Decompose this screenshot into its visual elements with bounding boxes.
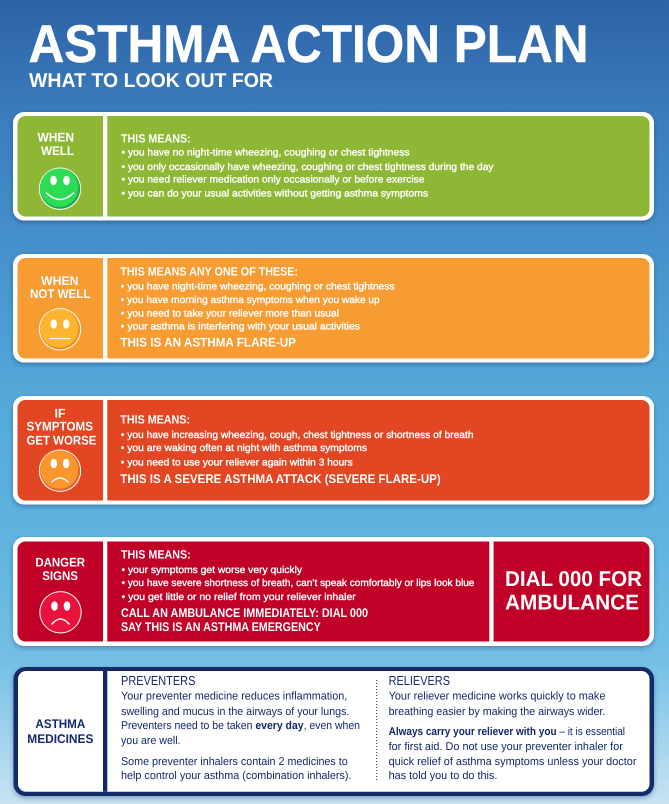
text: danger symptoms: • your symptoms get worse very quickly (122, 565, 302, 576)
zone label: when not well: WHEN (41, 274, 78, 288)
zone label: when well: WELL (41, 144, 74, 158)
text: worsening symptoms (120, 413, 474, 486)
text: when not well symptoms: • you have morning asthma symptoms when you wake up (121, 295, 380, 306)
text: danger symptoms: THIS MEANS: (121, 548, 191, 562)
zone label: danger signs: DANGER (35, 556, 85, 570)
text: relievers: Your reliever medicine works quickly to make (389, 691, 605, 703)
zone label: if symptoms get worse (26, 406, 96, 447)
text: relievers: for first aid. Do not use your preventer inhaler for (389, 741, 623, 753)
text: danger symptoms (121, 548, 475, 634)
zone label: danger signs (35, 556, 85, 583)
label: asthma medicines: MEDICINES (27, 732, 93, 746)
zone label: when not well: NOT WELL (30, 287, 91, 301)
text: when not well symptoms: • your asthma is interfering with your usual activities (121, 322, 360, 333)
panel: if symptoms get worse (13, 396, 654, 504)
text: relievers: breathing easier by making the airways wider. (389, 706, 605, 718)
text: relievers: quick relief of asthma symptoms unless your doctor (389, 756, 637, 768)
text: when well symptoms (121, 132, 494, 200)
text: when well symptoms: • you have no night-time wheezing, coughing or chest tightness (122, 148, 410, 159)
text: when well symptoms: • you only occasionally have wheezing, coughing or chest tightness during the day (122, 162, 494, 173)
panel: danger signs (13, 537, 654, 646)
panel: when well (13, 112, 654, 220)
zone label: danger signs: SIGNS (42, 569, 78, 583)
text: relievers: has told you to do this. (389, 770, 497, 782)
zone label: if symptoms get worse: GET WORSE (26, 433, 96, 447)
zone label: if symptoms get worse: SYMPTOMS (26, 420, 93, 434)
text: worsening symptoms: • you need to use your reliever again within 3 hours (121, 458, 353, 469)
subtitle: WHAT TO LOOK OUT FOR (29, 70, 274, 92)
panel: when not well (13, 254, 654, 362)
text: worsening symptoms: THIS IS A SEVERE ASTHMA ATTACK (SEVERE FLARE-UP) (120, 472, 441, 486)
icon: yellow neutral face (39, 308, 81, 350)
text: when well symptoms: • you can do your usual activities without getting asthma symptoms (122, 189, 428, 200)
text: danger symptoms: • you have severe shortness of breath, can’t speak comfortably or lips look blue (122, 578, 475, 589)
zone label: when well: WHEN (38, 130, 74, 144)
text: when well symptoms: • you need reliever medication only occasionally or before exercise (122, 175, 425, 186)
text: preventers: help control your asthma (combination inhalers). (121, 770, 352, 782)
icon: red sad face (39, 591, 82, 634)
callout: dial 000: AMBULANCE (505, 590, 639, 614)
label: asthma medicines: ASTHMA (35, 717, 85, 731)
text: relievers (389, 673, 637, 782)
text: when not well symptoms (120, 265, 395, 350)
text: worsening symptoms: • you are waking often at night with asthma symptoms (121, 443, 367, 454)
icon: green smiling face (39, 168, 81, 210)
callout: dial 000 (505, 567, 642, 614)
text: when well symptoms: THIS MEANS: (121, 132, 191, 146)
text: relievers: RELIEVERS (389, 673, 450, 688)
text: when not well symptoms: THIS IS AN ASTHMA FLARE-UP (120, 336, 296, 350)
icon: orange frowning face (39, 450, 81, 492)
text: when not well symptoms: • you need to take your reliever more than usual (121, 309, 339, 320)
text: preventers: Preventers need to be taken every day, even when (121, 720, 360, 732)
text: danger symptoms: CALL AN AMBULANCE IMMEDIATELY: DIAL 000 (121, 606, 368, 620)
label: asthma medicines (27, 717, 93, 746)
text: preventers: Your preventer medicine reduces inflammation, (121, 691, 347, 703)
title: ASTHMA ACTION PLAN (28, 15, 588, 74)
text: when not well symptoms: • you have night-time wheezing, coughing or chest tightness (121, 282, 395, 293)
text: danger symptoms: SAY THIS IS AN ASTHMA EMERGENCY (121, 620, 321, 634)
text: preventers: Some preventer inhalers contain 2 medicines to (121, 756, 348, 768)
zone label: when not well (30, 274, 91, 301)
text: preventers (121, 673, 360, 782)
callout: dial 000: DIAL 000 FOR (505, 567, 642, 591)
zone label: if symptoms get worse: IF (55, 406, 66, 420)
zone label: when well (38, 130, 74, 158)
text: worsening symptoms: THIS MEANS: (120, 413, 190, 427)
text: relievers: Always carry your reliever with you – it is essential (389, 726, 625, 738)
text: worsening symptoms: • you have increasing wheezing, cough, chest tightness or shortness of breath (121, 430, 474, 441)
panel: asthma medicines (14, 667, 654, 796)
text: danger symptoms: • you get little or no relief from your reliever inhaler (122, 592, 356, 603)
text: preventers: swelling and mucus in the airways of your lungs. (121, 706, 349, 718)
text: preventers: PREVENTERS (121, 673, 196, 688)
text: preventers: you are well. (121, 735, 180, 747)
text: when not well symptoms: THIS MEANS ANY ONE OF THESE: (120, 265, 298, 279)
